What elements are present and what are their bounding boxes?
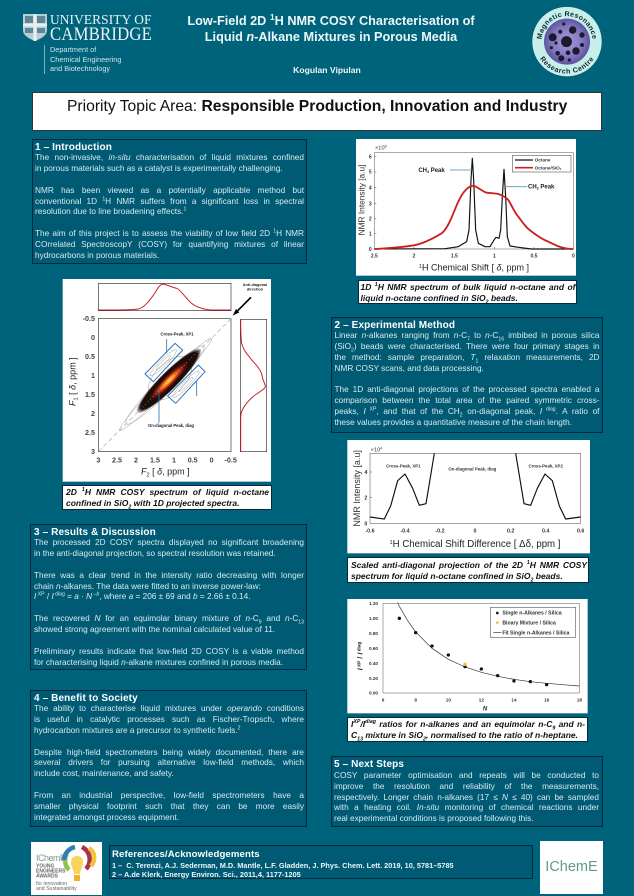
title: Low-Field 2D 1H NMR COSY Characterisation of [187,12,475,28]
anti-diagonal direction arrow [233,283,267,316]
caption: 2D COSY spectrum: 2D 1H NMR COSY spectrum of liquid n-octane [66,487,269,497]
spectrum: octane [374,158,573,249]
axes and ticks: 0.60 [369,646,378,651]
department name: Chemical Engineering [50,55,121,64]
text: introduction: COrrelated SpectroscopY (COSY) for quantifying mixtures of linear [35,240,304,249]
axis titles: 1 [419,264,422,270]
icon: light bulb with arcs [64,847,94,881]
axis labels: 3 [91,448,95,456]
axis titles: NMR Intensity [a.u] [357,165,367,235]
caption: anti-diagonal projection [347,557,589,583]
logo: Magnetic Resonance Research Centre [532,6,602,77]
plot frame and ticks [369,144,575,259]
plot frame and ticks: 5 [385,144,387,148]
axis labels: 0 [210,456,214,464]
heading: introduction: 1 – Introduction [35,142,112,153]
text: results and discussion: in the anti-diagonal projection, so spectral resolution was retained. [34,549,276,558]
author: Kogulan Vipulan [293,65,361,75]
legend [512,155,571,172]
axis titles [357,165,529,273]
axes and ticks: 6 [382,697,385,702]
department name [44,45,121,74]
axis labels: 1.5 [150,456,160,464]
axis tick labels: 0 [364,521,367,527]
axis titles [352,450,560,550]
axis titles: H Chemical Shift [ [422,263,496,273]
text: results and discussion: for characterising liquid n-alkane mixtures confined in porous media. [34,658,283,667]
axis labels: -0.5 [83,315,95,323]
caption: intensity ratio against chain length: IXP/Idiag ratios for n-alkanes and an equimolar n-C9 and n- [351,719,585,732]
caption: 1D NMR spectrum: 1D 1H NMR spectrum of bulk liquid n-octane and of [360,282,575,292]
panel: next steps [331,756,603,827]
plot frame and ticks: 0 [572,253,575,259]
text: introduction: resolution due to line broadening effects.1 [35,207,186,216]
text: next steps [334,771,599,823]
axis labels: 2 [134,456,138,464]
anti-diagonal direction arrow: direction [247,288,264,292]
axes and ticks: XP [357,661,362,668]
axis tick labels: 4 [380,447,382,451]
legend: Octane [535,158,551,163]
legend: Octane/SiO [535,165,560,170]
axes and ticks: 10 [446,697,451,702]
text: experimental method [334,331,600,427]
text: references: 2 – A.de Klerk, Energy Environ. Sci., 2011,4, 1177-1205 [112,870,301,879]
logo text [36,853,77,892]
cross-peak and diagonal peak annotations: Cross-Peak, XP1 [160,332,194,337]
right projection [240,319,267,452]
axis labels: 2 [146,472,150,478]
axis labels: F [68,400,78,406]
axis labels: 0.5 [188,456,198,464]
caption: intensity ratio against chain length [347,717,588,742]
logo text: ENGINEERS [36,868,66,874]
logo text: for innovation [36,881,67,887]
axis labels: 1 [172,456,176,464]
panel: results and discussion [30,524,307,670]
peak labels: Peak [539,185,555,191]
plot frame and ticks: 4 [369,185,372,191]
text: references [112,860,454,879]
axes and ticks: 18 [577,697,582,702]
panel: experimental method [331,317,603,433]
wordmark: University of Cambridge: UNIVERSITY OF [50,12,152,27]
axes and ticks: I [356,667,365,670]
text: benefit to society: The ability to characterise liquid mixtures under operando conditions [34,704,304,713]
text: results and discussion: The processed 2D COSY spectra displayed no significant broadening [34,538,304,547]
peak labels: Peak [429,168,445,174]
plot frame and ticks: 1 [369,232,372,238]
axes and ticks: 0.80 [369,631,378,636]
panel: references [109,845,533,879]
text: benefit to society: From an industrial perspective, low-field spectrometers have a [34,791,304,800]
banner text: Priority Topic Area: Responsible Production, Innovation and Industry [67,98,567,115]
axis labels: 2.5 [112,456,122,464]
heading: references: References/Acknowledgements [112,848,260,860]
legend: 2 [560,167,562,171]
axis labels: [ [150,467,157,477]
axes and ticks: 12 [479,697,484,702]
priority topic banner [32,92,602,131]
logo: Magnetic Resonance Research Centre: Magnetic Resonance [536,11,596,39]
axis labels: 1.5 [85,391,95,399]
logo text: IChemE [36,853,66,863]
peak labels: Cross-Peak, XP2 [528,464,563,469]
plot frame and ticks: 1 [493,253,496,259]
legend: Fit Single n-Alkanes / Silica [502,631,570,637]
axis tick labels: ×10 [371,448,380,454]
text: experimental method: NMR COSY scans, and data processing. [334,364,484,373]
projection curve [370,453,581,523]
text: next steps: with a heating coil. In-situ monitoring of chemical reactions under [334,803,599,812]
peak labels: 3 [537,187,539,191]
department name: and Biotechnology [50,64,110,73]
wordmark: University of Cambridge: CAMBRIDGE [50,24,152,45]
caption: intensity ratio against chain length: C13 mixture in SiO2, normalised to the ratio of n-heptane. [351,730,578,743]
text: introduction: The non-invasive, in-situ characterisation of liquid mixtures confined [35,153,304,162]
text: next steps: respectively. Longer chain n-alkanes (17 ≤ N ≤ 40) can be sampled [334,793,599,802]
text: experimental method: comparison between the total area of the paired symmetric cross- [334,396,600,405]
text: benefit to society: include cost, maintenance, and safety. [34,769,174,778]
legend: Single n-Alkanes / Silica [502,611,562,617]
plot frame and ticks: 2 [413,253,416,259]
text: results and discussion: Preliminary results indicate that low-field 2D COSY is a viable method [34,647,304,656]
axis tick labels: 0.4 [542,529,549,535]
axes and ticks: / [356,655,365,661]
text: results and discussion: There was a clear trend in the intensity ratio decreasing with longer [34,571,304,580]
icon: Cambridge crest [23,14,47,41]
axis tick labels: -0.4 [400,529,410,535]
text: references: 1 – C. Terenzi, A.J. Sederman, M.D. Mantle, L.F. Gladden, J. Phys. Chem. Lett. 2019, 10, 5781–5785 [112,860,454,870]
axis tick labels: 0.2 [507,529,514,535]
plot frame and ticks: ×10 [375,145,385,151]
peak labels [386,464,563,471]
logo: Magnetic Resonance Research Centre: Research Centre [540,56,594,74]
peak labels: Cross-Peak, XP1 [386,464,421,469]
caption: 1D NMR spectrum: liquid n-octane confined in SiO2 beads. [360,292,518,305]
axes and ticks: 1.20 [369,601,378,606]
axes and ticks [356,601,582,713]
peak labels: CH [418,168,427,174]
plot frame and ticks: 2.5 [371,253,378,259]
panel: benefit to society [30,690,307,827]
heading: benefit to society: 4 – Benefit to Society [34,693,138,704]
axis tick labels: 4 [364,470,367,476]
axis labels: δ, ppm ] [157,467,190,477]
axis labels: 0.5 [85,353,95,361]
wordmark: University of Cambridge [50,12,152,45]
axis tick labels: 2 [364,496,367,502]
cross-peak and diagonal peak annotations: On-diagonal Peak, diag [148,423,194,428]
caption: anti-diagonal projection: spectrum for liquid n-octane confined in SiO2 beads. [351,570,563,583]
title [187,12,475,44]
text: experimental method: the method: sample preparation, T1 relaxation measurements, 2D [334,353,600,364]
cross-peak and diagonal peak annotations [145,332,205,428]
axis labels: [ [68,390,78,397]
axis tick labels: -0.6 [365,529,375,535]
text: benefit to society: is useful in catalytic processes such as Fischer-Tropsch, where [34,715,304,724]
axis labels: -0.5 [224,456,237,464]
title: Liquid n-Alkane Mixtures in Porous Media [205,30,457,44]
figure: intensity ratio against chain length [347,599,588,714]
axis labels: δ, ppm ] [68,357,78,390]
axes and ticks: 0.20 [369,676,378,681]
department name: Department of [50,45,96,54]
text: benefit to society: several drivers for pursuing alternative low-field methods, which [34,758,304,767]
axes and ticks: diag [357,642,362,653]
axes and ticks: 14 [511,697,517,702]
axes and ticks: 1.00 [369,616,378,621]
text: experimental method: (SiO2) beads were characterised. There were four primary stages in [334,342,600,354]
plot frame and ticks: 3 [369,201,372,207]
top projection [98,283,231,311]
axes and ticks: I [356,652,365,655]
caption: 2D COSY spectrum [62,485,272,510]
axis titles: H Chemical Shift Difference [ Δδ, ppm ] [393,539,560,550]
axis tick labels [364,447,584,535]
panel: introduction [32,139,307,264]
text: introduction: NMR has been viewed as a potentially applicable method but [35,186,304,195]
axis labels: 0 [91,334,95,342]
fit curve [398,603,579,686]
figure: anti-diagonal projection [347,440,590,554]
logo: University of Cambridge [23,12,152,74]
axes and ticks: 0.00 [369,691,378,696]
plot frame and ticks: 5 [369,170,372,176]
text: introduction: in porous materials such as a catalyst is experimentally challenging. [35,164,283,173]
caption: 2D COSY spectrum: confined in SiO2 with 1D projected spectra. [66,498,239,511]
axis titles: 1 [390,540,393,546]
logo text: YOUNG [36,864,54,870]
figure: 2D COSY spectrum [62,279,271,482]
spectrum: octane in silica [374,186,573,249]
text: introduction: hydrocarbons in porous materials. [35,251,159,260]
plot frame and ticks: 1.5 [451,253,458,259]
text: benefit to society: Despite high-field spectrometers being widely documented, there are [34,748,304,757]
main contour plot [98,319,231,452]
logo: IChemE [540,841,603,894]
text: benefit to society: integrated amongst process equipment. [34,813,179,822]
peak labels: CH [528,185,537,191]
axis labels: F [141,467,147,477]
axis labels: 2 [91,410,95,418]
axis labels: 1 [91,372,95,380]
caption: 1D NMR spectrum [358,280,577,304]
plot frame and ticks: 2 [369,216,372,222]
axes and ticks: 0.40 [369,661,378,666]
text: next steps: COSY parameter optimisation and repeats will be conducted to [334,771,599,780]
anti-diagonal direction arrow: Anti-diagonal [243,283,267,287]
peak labels: On-diagonal Peak, diag [448,466,497,471]
axis labels: 2.5 [85,429,95,437]
text: experimental method: Linear n-alkanes ranging from n-C7 to n-C16 imbibed in porous silica [334,331,600,343]
text: results and discussion [34,538,304,667]
heading: next steps: 5 – Next Steps [334,759,404,770]
peak labels [418,168,555,191]
text: results and discussion: The recovered N for an equimolar binary mixture of n-C9 and n-C13 [34,614,304,626]
plot frame and ticks: 6 [369,154,372,160]
data points [398,617,548,686]
text: benefit to society: hydrocarbon mixtures are a precursor to synthetic fuels.2 [34,725,240,735]
axis tick labels: 0 [474,529,477,535]
text: results and discussion: showed strong agreement with the nominal calculated value of 11. [34,625,275,634]
logo: IChemE: IChemE [545,859,598,875]
text: next steps: real experimental conditions is proposed following this. [334,814,533,823]
axis titles: NMR Intensity [a.u] [352,450,362,527]
legend [490,607,576,637]
axis labels: 1 [73,397,79,401]
text: experimental method: The 1D anti-diagonal projections of the processed spectra enabled a [334,385,600,394]
logo text: AWARDS [36,874,59,880]
text: results and discussion: chain n-alkanes. The data were fitted to an inverse power-law: [34,582,261,591]
plot frame and ticks: 0.5 [531,253,538,259]
text: next steps: improve the resolution and reliability of the measurements, [334,782,599,791]
logo: IChemE Young Engineers Awards [31,842,102,895]
text: experimental method: these values provides a quantitative measure of the chain length. [334,418,572,427]
text: experimental method: peaks, I XP, and that of the CH2 on-diagonal peak, I diag. A ratio of [334,406,599,419]
text: introduction: conventional 1D 1H NMR suffers from a significant loss in spectral [35,196,304,206]
peak labels: 3 [427,170,429,174]
axis labels [68,315,237,478]
text: results and discussion: I XP / I diag = a · N –b, where a = 206 ± 69 and b = 2.66 ± 0.14. [34,592,251,601]
axes and ticks: N [483,707,488,713]
legend: Binary Mixture / Silica [502,621,556,627]
axis tick labels: 0.6 [577,529,584,535]
text: benefit to society [34,704,304,822]
plot frame and ticks: 0 [369,247,372,253]
heading: experimental method: 2 – Experimental Method [334,320,455,331]
axis tick labels: -0.2 [435,529,445,535]
logo text: and Sustainability [36,886,77,892]
text: introduction: The aim of this project is to assess the viability of low field 2D 1H NMR [35,228,304,238]
figure: 1D NMR spectrum [356,139,576,276]
axes and ticks: 8 [414,697,417,702]
axis labels: 3 [96,456,100,464]
text: benefit to society: smaller physical footprint such that they can be more easily [34,802,304,811]
caption: anti-diagonal projection: Scaled anti-diagonal projection of the 2D 1H NMR COSY [351,560,587,570]
axis titles: δ, ppm ] [496,263,529,273]
heading: results and discussion: 3 – Results & Discussion [34,527,156,538]
axes and ticks: 16 [544,697,550,702]
text: introduction [35,153,304,260]
